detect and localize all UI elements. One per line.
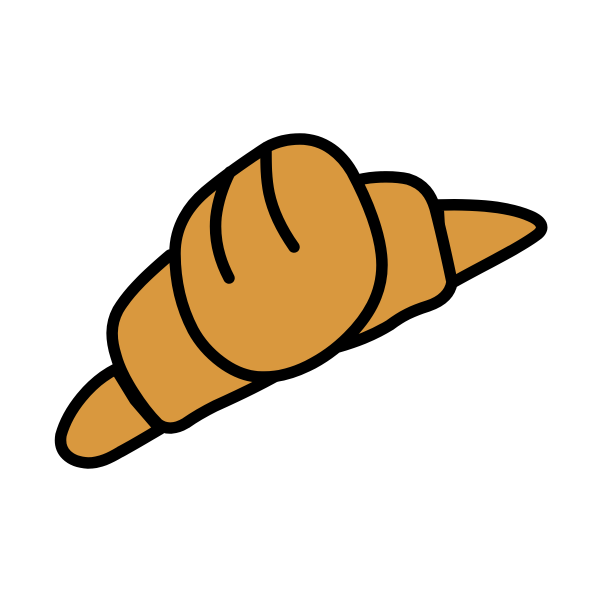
right tip of croissant [438,205,542,283]
left segment of croissant [112,255,276,428]
central roll of croissant [175,139,382,377]
right segment of croissant [338,177,452,347]
score mark: right crease [266,150,294,247]
score mark: left crease [216,172,230,278]
left tip of croissant [61,369,160,463]
